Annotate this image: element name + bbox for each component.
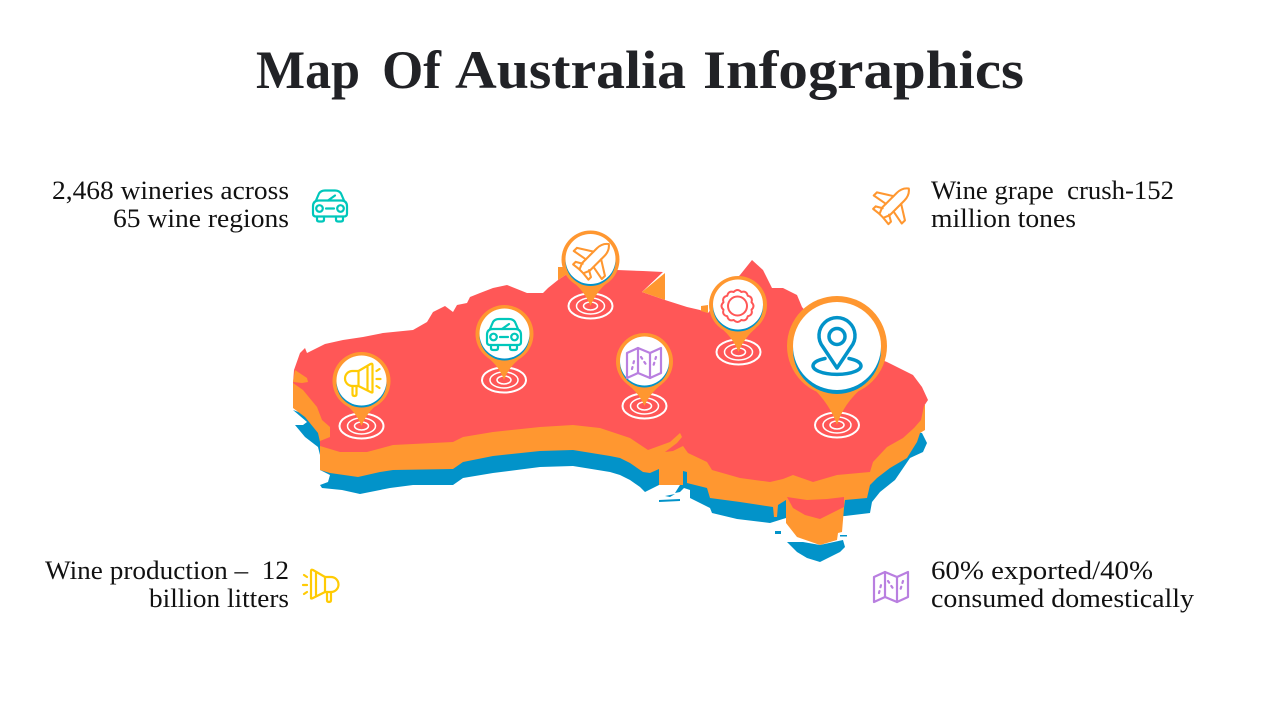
icon: car bbox=[313, 190, 347, 222]
callout: wineries bbox=[52, 176, 289, 233]
title: Infographics bbox=[703, 40, 1024, 100]
callout: exports bbox=[931, 556, 1194, 613]
pin: car bbox=[476, 305, 534, 392]
northern orange inlets bbox=[293, 267, 708, 383]
callout: grape crush bbox=[931, 176, 1174, 233]
pin: map bbox=[616, 333, 673, 418]
callout: exports: 60% exported/40% bbox=[931, 556, 1153, 585]
callout: grape crush: Wine grape crush-152 bbox=[931, 176, 1174, 205]
map layer: orange middle bbox=[293, 380, 925, 545]
map layer: red top bbox=[293, 260, 928, 482]
title: Of bbox=[382, 40, 442, 100]
callout: production: billion litters bbox=[149, 584, 289, 613]
callout: exports: consumed domestically bbox=[931, 584, 1194, 613]
pin: megaphone bbox=[332, 352, 390, 438]
pin: sun badge bbox=[709, 276, 767, 364]
title bbox=[256, 40, 1024, 100]
callout: production bbox=[45, 556, 289, 613]
map layer: blue base bbox=[293, 400, 927, 562]
callout: grape crush: million tones bbox=[931, 204, 1076, 233]
map of Australia bbox=[293, 260, 928, 562]
icon: map bbox=[874, 572, 908, 602]
title: Map bbox=[256, 40, 360, 100]
pin: plane bbox=[562, 230, 623, 318]
callout: production: Wine production – 12 bbox=[45, 556, 289, 585]
title: Australia bbox=[455, 40, 686, 100]
Tasmania bbox=[787, 497, 844, 519]
icon: plane bbox=[867, 175, 923, 231]
callout: wineries: 65 wine regions bbox=[113, 204, 289, 233]
pin: large location marker bbox=[787, 296, 887, 438]
callout: wineries: 2,468 wineries across bbox=[52, 176, 289, 205]
icon: megaphone bbox=[303, 570, 338, 602]
